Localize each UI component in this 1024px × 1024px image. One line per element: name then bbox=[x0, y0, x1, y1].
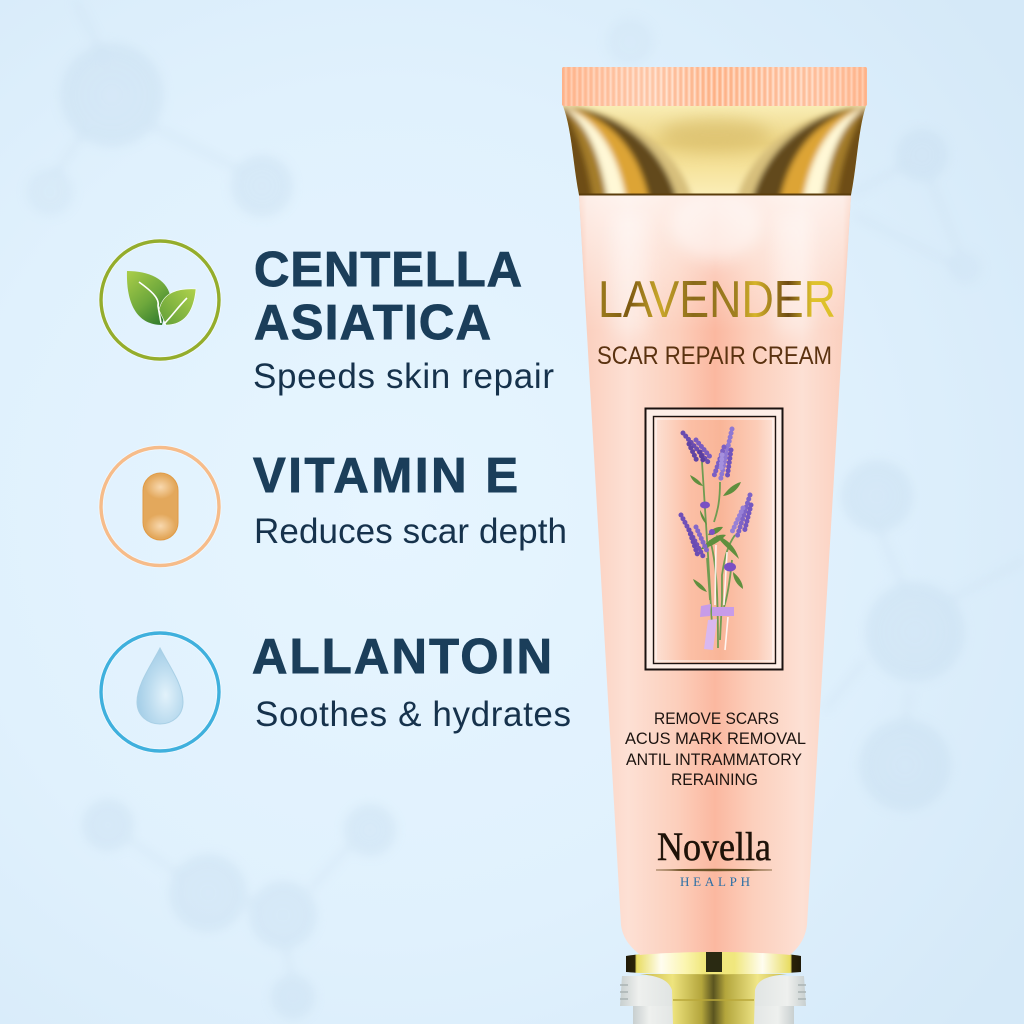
double frame bbox=[646, 408, 782, 670]
claims list bbox=[625, 709, 806, 789]
icon: capsule bbox=[101, 448, 219, 566]
brand logo bbox=[656, 824, 772, 889]
body top highlight bbox=[579, 196, 851, 332]
stems bbox=[702, 462, 735, 648]
flower spikes bbox=[681, 429, 751, 558]
tube nozzle and threads bbox=[620, 974, 806, 1024]
description: Soothes & hydrates bbox=[255, 695, 571, 734]
ingredient: Centella Asiatica bbox=[101, 241, 554, 396]
ribbed cap bbox=[562, 67, 867, 106]
ingredient: Allantoin bbox=[101, 630, 571, 751]
description: Reduces scar depth bbox=[254, 512, 567, 551]
description: Speeds skin repair bbox=[253, 357, 554, 396]
gold collar bbox=[626, 950, 801, 974]
claims list: RERAINING bbox=[671, 770, 758, 789]
claims list: REMOVE SCARS bbox=[654, 709, 779, 728]
gold shoulder bbox=[562, 106, 867, 204]
brand logo: Novella bbox=[657, 824, 771, 869]
ribbon bbox=[700, 604, 734, 650]
white stem highlights bbox=[715, 545, 728, 650]
product tube bbox=[562, 67, 867, 1024]
icon: water drop bbox=[101, 633, 219, 751]
icon: leaves bbox=[101, 241, 219, 359]
single florets bbox=[700, 502, 736, 572]
heading: Vitamin E: VITAMIN E bbox=[253, 449, 518, 503]
framed lavender illustration bbox=[646, 408, 782, 670]
heading: Asiatica: ASIATICA bbox=[254, 296, 491, 350]
leaves bbox=[690, 475, 743, 592]
claims list: ACUS MARK REMOVAL bbox=[625, 729, 806, 748]
ingredient: Vitamin E bbox=[101, 448, 567, 566]
heading: Allantoin: ALLANTOIN bbox=[252, 630, 552, 684]
brand logo: HEALPH bbox=[680, 874, 750, 889]
tube body bbox=[579, 195, 851, 955]
claims list: ANTIL INTRAMMATORY bbox=[626, 750, 802, 769]
heading: Centella: CENTELLA bbox=[254, 243, 522, 297]
product subtitle: SCAR REPAIR CREAM bbox=[597, 342, 832, 370]
lavender sprigs bbox=[681, 429, 751, 650]
product name: LAVENDER bbox=[598, 271, 836, 329]
